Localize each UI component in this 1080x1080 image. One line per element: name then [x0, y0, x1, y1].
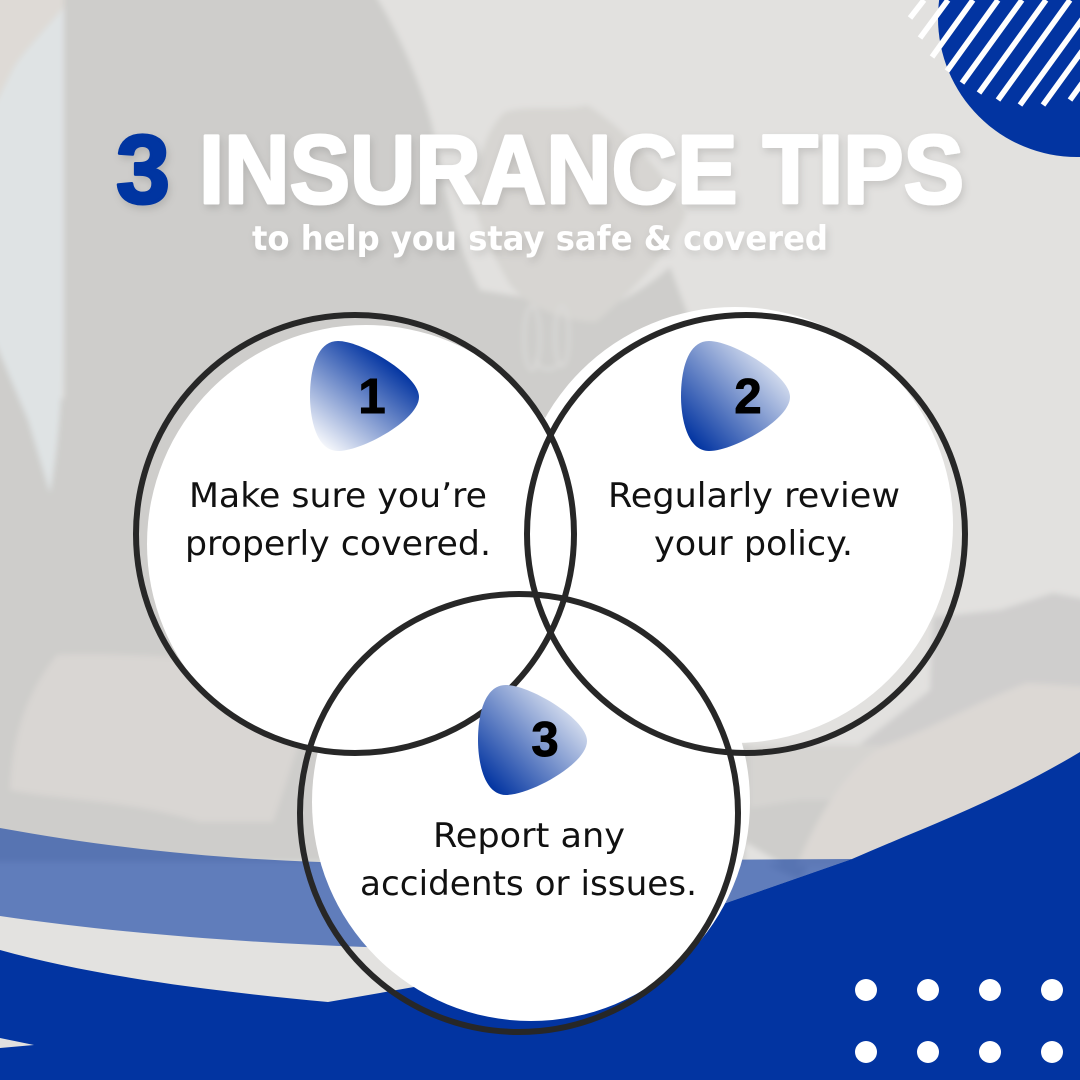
tip 2: text: your policy. [654, 524, 853, 564]
solid blue wave bottom [0, 752, 1080, 1080]
decorative striped circle top right [910, 0, 1080, 157]
tip 1: badge [310, 341, 419, 451]
title: 3 [116, 115, 170, 224]
white circle fills [147, 307, 953, 1021]
tip 3: text: Report any [433, 816, 625, 856]
tip 3: badge: 3 [531, 713, 559, 767]
tip 3: badge [478, 685, 587, 795]
circle outlines [136, 315, 965, 1032]
tip 2: badge: 2 [734, 370, 762, 424]
tip 2: text: Regularly review [608, 476, 900, 516]
translucent blue band bottom left [0, 828, 852, 949]
title: INSURANCE TIPS [199, 115, 964, 224]
tip 1: badge: 1 [358, 370, 386, 424]
white dots grid bottom right [855, 979, 1063, 1063]
subtitle: to help you stay safe & covered [252, 219, 828, 259]
tip 2: badge [681, 341, 790, 451]
tip 3: text [360, 816, 697, 904]
tip 1: text: Make sure you’re [189, 476, 487, 516]
tip 3: text: accidents or issues. [360, 864, 697, 904]
tip 1: text [185, 476, 491, 564]
tip 1: text: properly covered. [185, 524, 491, 564]
tip 2: text [608, 476, 900, 564]
